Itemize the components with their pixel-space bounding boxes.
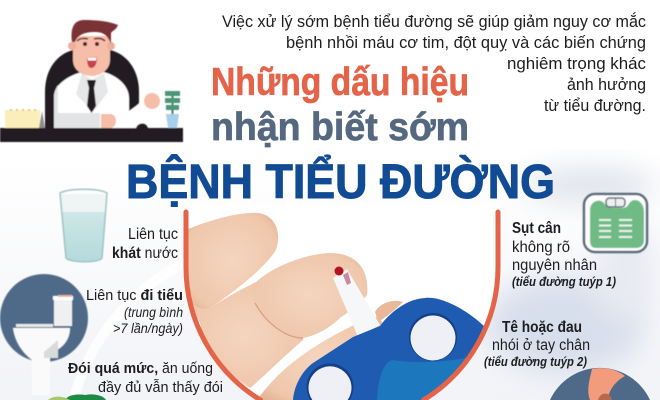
- doctor coat: [54, 72, 152, 128]
- hands: [101, 114, 116, 128]
- sign: numbness or pain: nhói ở tay chân: [492, 337, 590, 354]
- blood drop: [334, 266, 344, 276]
- desk: [0, 128, 183, 142]
- title: [126, 61, 555, 209]
- hair: [72, 20, 118, 44]
- intro paragraph: Việc xử lý sớm bệnh tiểu đường sẽ giúp giảm nguy cơ mắc: [222, 12, 646, 31]
- plant: [172, 92, 174, 115]
- mouth: [87, 57, 97, 68]
- sign: numbness or pain: [484, 319, 590, 369]
- illustration: doctor at desk: [0, 20, 183, 142]
- finger: top: [186, 213, 278, 309]
- icon: painful knee: [550, 368, 650, 400]
- meter: [293, 298, 485, 400]
- test strip: [333, 269, 380, 337]
- sign: weight loss: (tiểu đường tuýp 1): [512, 274, 616, 289]
- lower hand: [257, 317, 390, 400]
- icon: toilet: [0, 274, 88, 395]
- eyes and brows: [83, 42, 87, 46]
- notepad: [5, 110, 40, 128]
- finger: with blood sample: [252, 253, 367, 338]
- sign: frequent urination: Liên tục đi tiểu: [86, 287, 183, 304]
- icon: glass of water: [60, 189, 107, 262]
- sign: frequent urination: >7 lần/ngày): [113, 321, 183, 336]
- photo: finger test with glucose meter: [186, 205, 498, 400]
- sign: frequent urination: (trung bình: [124, 305, 183, 320]
- sign: thirst: [112, 226, 178, 262]
- intro paragraph: ảnh hưởng: [567, 76, 646, 94]
- sign: thirst: Liên tục: [128, 226, 178, 243]
- collar: [76, 73, 108, 112]
- title: Những dấu hiệu: [211, 61, 469, 104]
- sign: thirst: khát nước: [112, 245, 178, 262]
- sign: weight loss: không rõ: [512, 239, 570, 256]
- tie: [87, 80, 96, 113]
- intro paragraph: bệnh nhồi máu cơ tim, đột quỵ và các biến chứng: [286, 34, 646, 52]
- head: [73, 36, 110, 76]
- intro paragraph: [222, 12, 646, 115]
- finger: lower: [186, 282, 303, 388]
- sign: excessive hunger: Đói quá mức, ăn uống: [68, 360, 213, 377]
- sign: numbness or pain: Tê hoặc đau: [502, 319, 582, 336]
- sign: numbness or pain: (tiểu đường tuýp 2): [484, 354, 587, 369]
- sign: weight loss: Sụt cân: [512, 220, 561, 237]
- intro paragraph: từ tiểu đường.: [544, 97, 646, 115]
- icon: weighing scale: [584, 194, 647, 252]
- mouse: [136, 124, 148, 128]
- sign: weight loss: nguyên nhân: [512, 257, 597, 274]
- title: nhận biết sớm: [211, 106, 469, 149]
- sign: excessive hunger: đầy đủ vẫn thấy đói: [98, 379, 223, 396]
- title: BỆNH TIỂU ĐƯỜNG: [126, 154, 555, 209]
- sign: weight loss: [512, 220, 616, 289]
- thumb tip: [375, 301, 403, 322]
- U-shaped frame: [186, 212, 498, 400]
- sign: frequent urination: [86, 287, 183, 336]
- chair: [45, 50, 139, 128]
- intro paragraph: nghiêm trọng khác: [507, 55, 646, 73]
- icon: salad: [48, 394, 106, 400]
- sign: excessive hunger: [68, 360, 223, 396]
